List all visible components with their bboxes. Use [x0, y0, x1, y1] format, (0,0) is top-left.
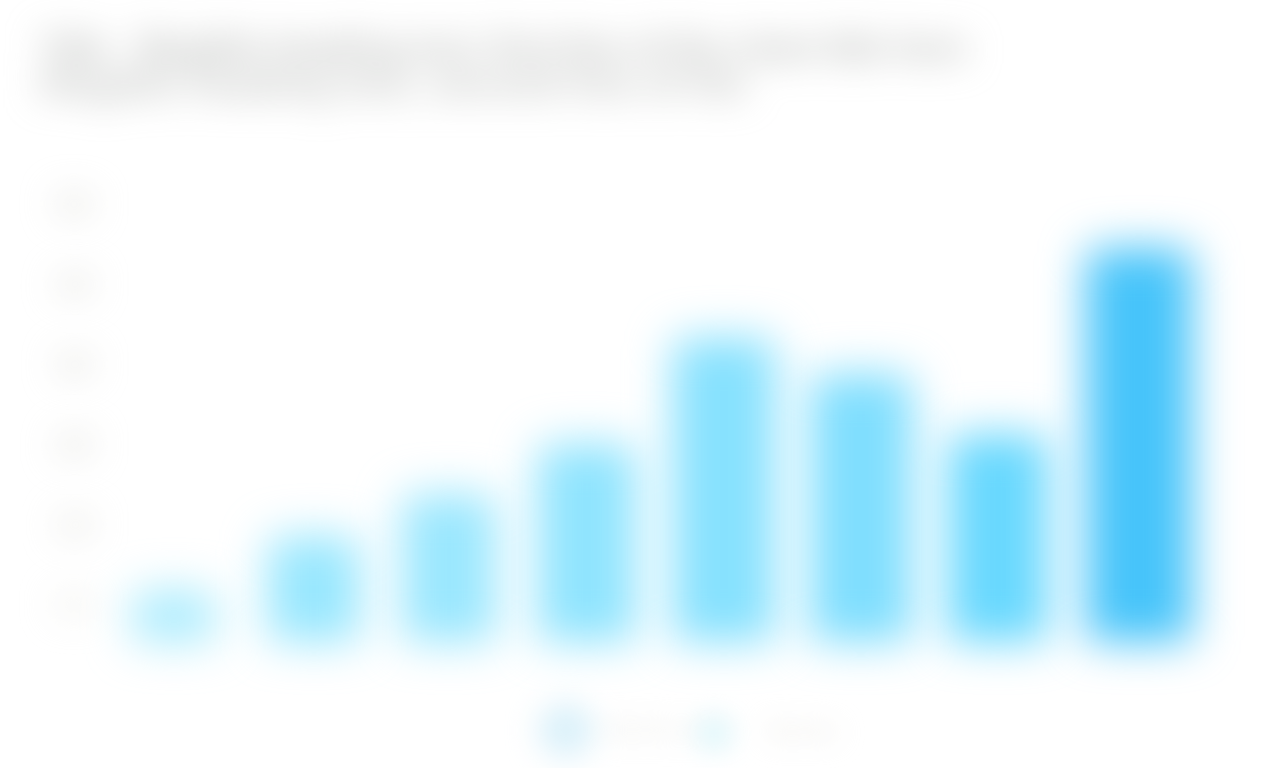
- bar 7: [948, 434, 1048, 642]
- y axis labels: 40: [55, 266, 93, 304]
- legend label 2: Series: [766, 718, 838, 745]
- legend swatch 1: [538, 702, 594, 758]
- y axis labels: 00: [55, 586, 93, 624]
- legend: [530, 694, 838, 766]
- y axis labels: 30: [55, 346, 93, 384]
- y axis labels: [0, 0, 110, 640]
- y axis labels: 20: [55, 426, 93, 464]
- bar 2: [268, 536, 360, 642]
- bar 8: [1086, 248, 1192, 642]
- bar chart: [108, 212, 1228, 678]
- y axis labels: 50: [55, 186, 93, 224]
- bar 6: [810, 374, 912, 642]
- legend swatch 2: [695, 714, 733, 752]
- legend label 1: Series one: [606, 716, 727, 743]
- bar 3: [402, 494, 496, 642]
- title: Title Illegible heading text, first line of the chart title here: [40, 27, 966, 68]
- bar 5: [673, 338, 775, 642]
- title: Illegible heading text, second line of the: [40, 63, 747, 104]
- bar 1: [132, 590, 216, 642]
- title: [35, 24, 966, 112]
- bar 4: [538, 444, 636, 642]
- y axis labels: 10: [55, 506, 93, 544]
